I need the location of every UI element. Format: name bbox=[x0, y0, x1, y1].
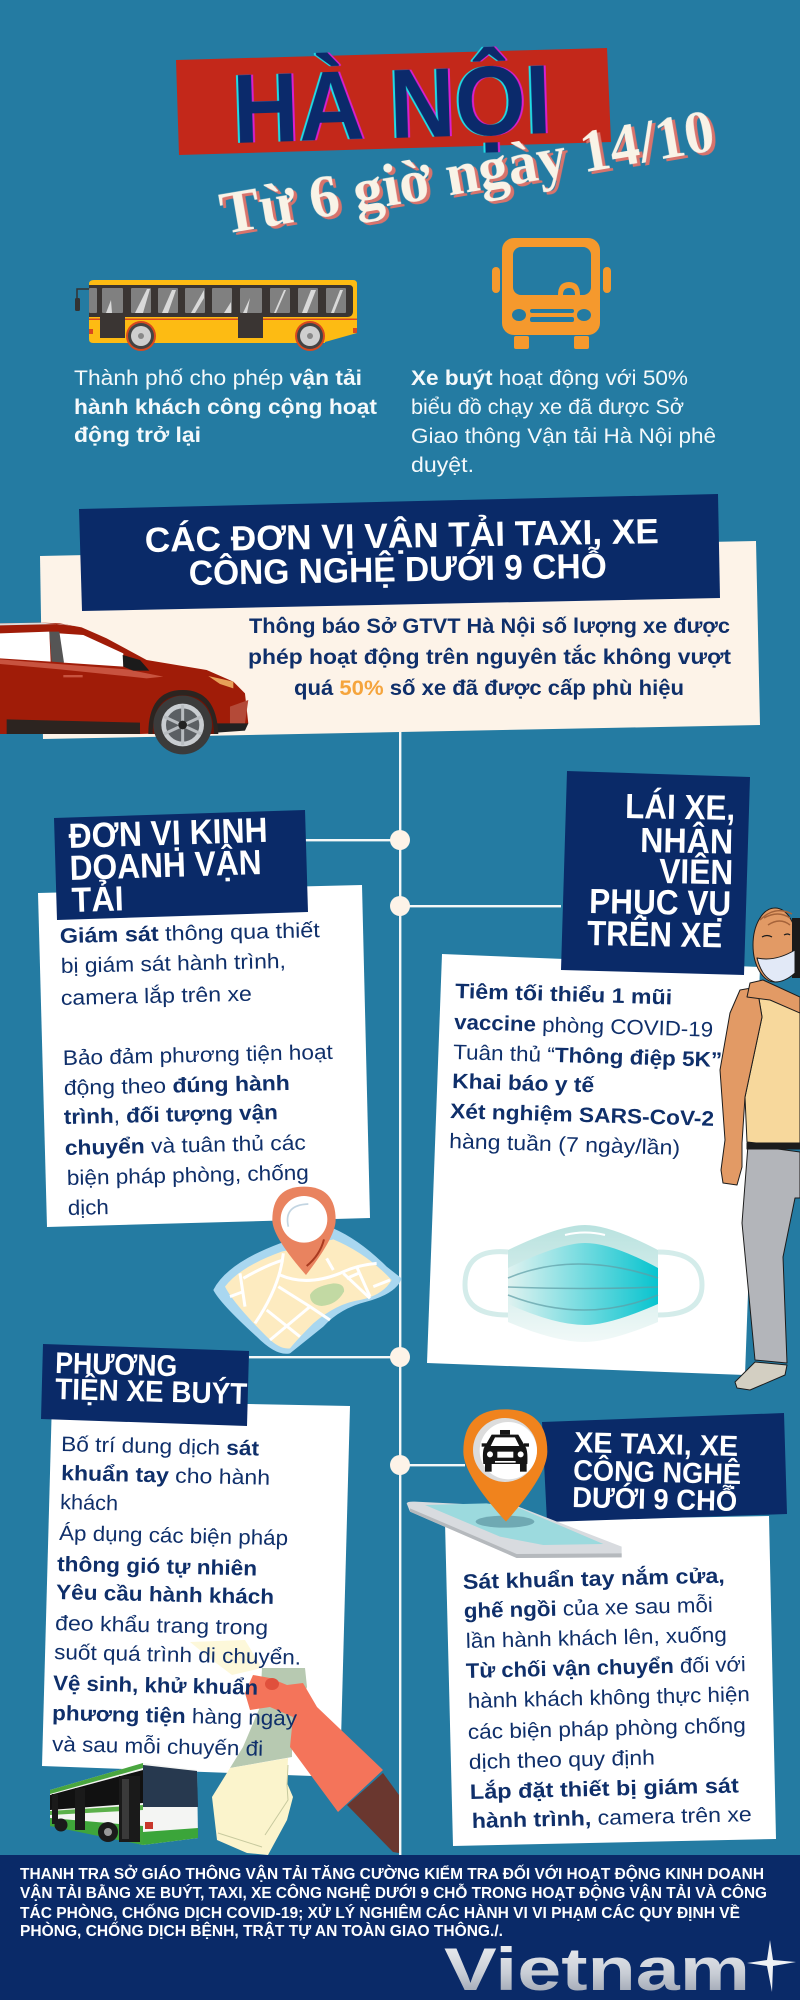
heading: taxi and ride-hailing: CÔNG NGHỆ bbox=[573, 1453, 742, 1491]
text: bus measures: Vệ sinh, khử khuẩn bbox=[53, 1672, 258, 1700]
text: taxi measures: ghế ngồi của xe sau mỗi bbox=[464, 1594, 713, 1623]
panel: bus vehicles bbox=[42, 1400, 399, 1855]
heading: drivers and crew: PHỤC VỤ bbox=[589, 882, 732, 923]
icon: hand holding spray bottle bbox=[212, 1668, 399, 1855]
text: bus measures: suốt quá trình di chuyển. bbox=[54, 1641, 301, 1670]
text: driver requirements: vaccine phòng COVID-19 bbox=[454, 1011, 713, 1042]
text: taxi measures: hành khách không thực hiện bbox=[468, 1683, 750, 1713]
heading: drivers and crew bbox=[561, 771, 750, 975]
text: buses operate at 50% bbox=[411, 367, 716, 477]
text: monitoring and routes: chuyển và tuân thủ các bbox=[65, 1132, 306, 1160]
footer text bbox=[20, 1863, 767, 1940]
panel heading bbox=[79, 494, 720, 611]
heading: transport businesses: DOANH VẬN bbox=[69, 842, 262, 888]
heading: taxi and ride-hailing: XE TAXI, XE bbox=[574, 1427, 739, 1463]
icon: yellow bus bbox=[75, 280, 357, 351]
panel: taxi and ride-hailing units bbox=[40, 494, 760, 739]
timeline spine bbox=[399, 732, 401, 1856]
footer text: PHÒNG, CHỐNG DỊCH BỆNH, TRẬT TỰ AN TOÀN GIAO THÔNG./. bbox=[20, 1920, 503, 1940]
heading: bus vehicles bbox=[41, 1344, 249, 1426]
text: 50 percent limit notice: quá 50% số xe đã được cấp phù hiệu bbox=[294, 677, 684, 700]
text: monitoring and routes: Giám sát thông qua thiết bbox=[60, 919, 320, 948]
node and connector: taxis bbox=[390, 1455, 465, 1475]
text: buses operate at 50%: duyệt. bbox=[411, 454, 474, 477]
text: taxi measures: Từ chối vận chuyển đối với bbox=[466, 1653, 746, 1683]
heading: drivers and crew: NHÂN bbox=[640, 820, 734, 862]
text: city allows public transport: hành khách công cộng hoạt bbox=[74, 396, 377, 419]
text: driver requirements: Xét nghiệm SARS-CoV-2 bbox=[450, 1100, 714, 1131]
subtitle date: Từ 6 giờ ngày 14/10 bbox=[215, 98, 719, 247]
footer text: TÁC PHÒNG, CHỐNG DỊCH COVID-19; XỬ LÝ NGHIÊM CÁC HÀNH VI VI PHẠM CÁC QUY ĐỊNH VỀ bbox=[20, 1902, 740, 1922]
heading: transport businesses: ĐƠN VỊ KINH bbox=[68, 811, 268, 856]
footer text: VẬN TẢI BẰNG XE BUÝT, TAXI, XE CÔNG NGHỆ DƯỚI 9 CHỖ TRONG HOẠT ĐỘNG VẬN TẢI VÀ CÔNG bbox=[20, 1883, 767, 1902]
text: monitoring and routes: biện pháp phòng, chống bbox=[67, 1162, 309, 1190]
heading: taxi and ride-hailing: DƯỚI 9 CHỖ bbox=[572, 1480, 738, 1518]
text: monitoring and routes bbox=[60, 919, 333, 1220]
text: driver requirements: hàng tuần (7 ngày/lần) bbox=[449, 1130, 680, 1160]
icon: phone with taxi pin bbox=[407, 1409, 622, 1558]
text: driver requirements bbox=[449, 980, 722, 1160]
text: 50 percent limit notice bbox=[248, 615, 731, 700]
heading: bus vehicles: TIỆN XE BUÝT bbox=[55, 1372, 248, 1411]
icon: map with pin bbox=[213, 1187, 402, 1354]
panel: transport businesses bbox=[38, 810, 370, 1227]
text: city allows public transport bbox=[74, 367, 377, 447]
text: monitoring and routes: dịch bbox=[68, 1196, 109, 1220]
title banner: HÀ NỘI bbox=[231, 44, 553, 164]
text: city allows public transport: Thành phố cho phép vận tải bbox=[74, 367, 362, 390]
panel: taxi and ride-hailing rules bbox=[445, 1516, 776, 1846]
heading: transport businesses bbox=[54, 810, 308, 920]
heading: drivers and crew: TRÊN XE bbox=[587, 913, 723, 955]
footer text: THANH TRA SỞ GIÁO THÔNG VẬN TẢI TĂNG CƯỜNG KIỂM TRA ĐỐI VỚI HOẠT ĐỘNG KINH DOANH bbox=[20, 1863, 764, 1883]
panel heading: CÁC ĐƠN VỊ VẬN TẢI TAXI, XE bbox=[144, 511, 659, 560]
text: bus measures: Bố trí dung dịch sát bbox=[61, 1433, 259, 1460]
text: driver requirements: Tuân thủ “ Thông điệp 5K” bbox=[453, 1041, 722, 1072]
text: taxi measures: hành trình, camera trên xe bbox=[472, 1803, 752, 1833]
text: monitoring and routes: trình, đối tượng vận bbox=[64, 1101, 278, 1129]
text: buses operate at 50%: Giao thông Vận tải Hà Nội phê bbox=[411, 425, 716, 448]
text: bus measures: khách bbox=[60, 1491, 118, 1515]
heading: drivers and crew: VIÊN bbox=[659, 851, 734, 892]
text: buses operate at 50%: Xe buýt hoạt động với 50% bbox=[411, 367, 688, 390]
text: bus measures: khuẩn tay cho hành bbox=[61, 1462, 270, 1490]
text: taxi measures: dịch theo quy định bbox=[469, 1746, 655, 1774]
icon: red car bbox=[0, 623, 248, 754]
text: bus measures: Áp dụng các biện pháp bbox=[59, 1522, 288, 1550]
icon: green and white bus bbox=[50, 1763, 198, 1845]
panel heading: CÔNG NGHỆ DƯỚI 9 CHỖ bbox=[188, 546, 607, 593]
text: buses operate at 50%: biểu đồ chạy xe đã được Sở bbox=[411, 396, 684, 419]
heading: bus vehicles: PHƯƠNG bbox=[55, 1347, 178, 1383]
text: bus measures: đeo khẩu trang trong bbox=[55, 1612, 268, 1640]
heading: transport businesses: TẢI bbox=[71, 878, 124, 920]
text: bus measures: phương tiện hàng ngày bbox=[52, 1702, 298, 1731]
icon: surgical mask bbox=[465, 1225, 702, 1342]
icon: orange bus front bbox=[492, 238, 611, 349]
text: monitoring and routes: Bảo đảm phương tiện hoạt bbox=[63, 1041, 333, 1070]
text: taxi measures: lần hành khách lên, xuống bbox=[466, 1624, 727, 1653]
text: bus measures bbox=[52, 1433, 301, 1761]
heading: taxi and ride-hailing bbox=[542, 1413, 787, 1522]
node and connector: drivers and crew bbox=[390, 896, 561, 916]
text: bus measures: thông gió tự nhiên bbox=[57, 1553, 257, 1581]
footer band bbox=[0, 1855, 800, 2000]
text: 50 percent limit notice: Thông báo Sở GTVT Hà Nội số lượng xe được bbox=[249, 615, 730, 638]
text: taxi measures: Lắp đặt thiết bị giám sát bbox=[470, 1773, 739, 1804]
icon: taxi front bbox=[482, 1430, 529, 1472]
decorative sparkle behind spray bbox=[190, 1640, 262, 1675]
text: taxi measures bbox=[463, 1564, 752, 1833]
panel: drivers and crew bbox=[427, 954, 760, 1375]
heading: drivers and crew: LÁI XE, bbox=[625, 786, 736, 828]
text: taxi measures: các biện pháp phòng chống bbox=[468, 1714, 746, 1744]
text: 50 percent limit notice: phép hoạt động trên nguyên tắc không vượt bbox=[248, 645, 731, 669]
logo: Vietnam+ bbox=[444, 1936, 796, 2000]
text: bus measures: và sau mỗi chuyến đi bbox=[52, 1733, 263, 1761]
text: driver requirements: Tiêm tối thiểu 1 mũi bbox=[455, 980, 672, 1009]
node and connector: buses bbox=[249, 1347, 410, 1367]
node and connector: transport businesses bbox=[305, 830, 410, 850]
text: monitoring and routes: động theo đúng hành bbox=[64, 1072, 290, 1100]
text: monitoring and routes: bị giám sát hành trình, bbox=[61, 950, 286, 978]
text: monitoring and routes: camera lắp trên xe bbox=[61, 983, 252, 1010]
text: bus measures: Yêu cầu hành khách bbox=[56, 1581, 274, 1609]
text: taxi measures: Sát khuẩn tay nắm cửa, bbox=[463, 1564, 725, 1594]
illustration: masked man bbox=[720, 908, 800, 1390]
text: city allows public transport: động trở lại bbox=[74, 424, 201, 447]
text: driver requirements: Khai báo y tế bbox=[452, 1070, 595, 1097]
